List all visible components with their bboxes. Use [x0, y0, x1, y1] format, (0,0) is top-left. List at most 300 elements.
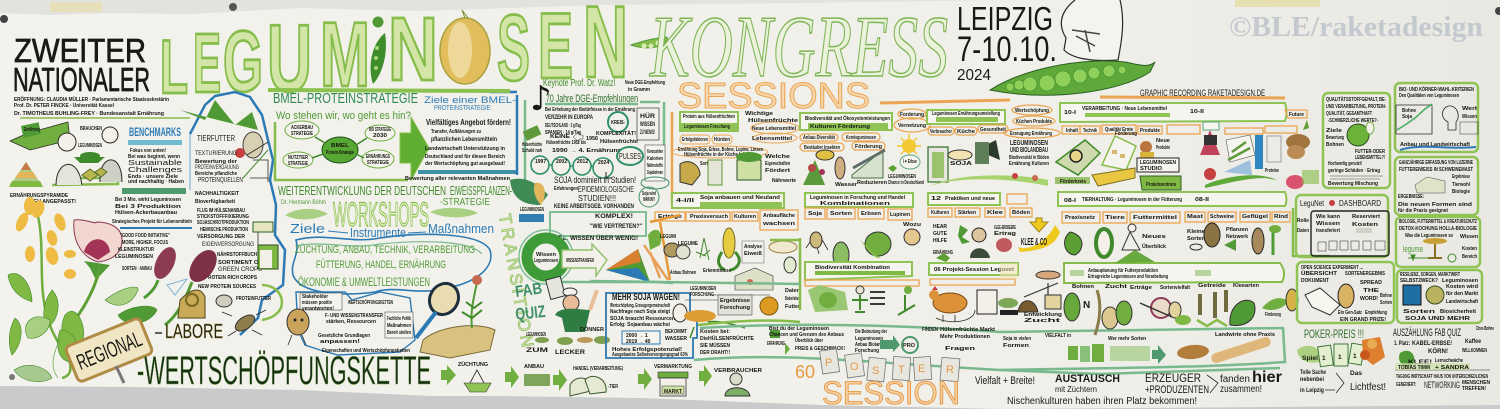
row 3 right: legume characters: Bohnen: [1072, 284, 1094, 290]
heading: Weiterentwicklung Eiweißpflanzenstrategie: -STRATEGIE: [440, 197, 490, 208]
session 2: pollinators and climate: Kornleguminosen: [846, 135, 876, 141]
session 1: Ernährung illustrations: Erfolgsfaktoren: [682, 137, 708, 143]
session 3: Landwirtschaft, Ernährungs-Kommunikation: LEGUMINOSEN: [1010, 140, 1048, 147]
panel: Auszählung FAB Quiz: [1393, 326, 1494, 392]
row 2 right: Klee &amp; Co: Netzwerk: [1226, 234, 1248, 240]
row 2 left illustrations: corn and characters: Anbau Bohnen: [670, 270, 696, 276]
panel: row 2 left field illustration: Bodenleben: [785, 296, 800, 302]
row 2 orange idea boxes: Praxisnetz: [1065, 215, 1096, 221]
session 2: pollinators and climate: Anbau Diversität: [803, 135, 835, 141]
session 1: Ernährung illustrations: Neue Lebensmittel: [752, 126, 797, 132]
row 2 session headers: Kombinationen: [820, 201, 890, 207]
panel: complex studies note: KEINE ARBEITSGEB. VORHANDEN: [554, 203, 634, 210]
title: Leguminosen: L: [160, 25, 188, 110]
icon: clover blossoms: KLEINSTRUKTUR: [118, 247, 154, 253]
session 10: books, butter, studio: Förderung: [1115, 131, 1137, 137]
icon: halved legume as letter O: [440, 10, 490, 84]
text: poster session takeaways: AUSTAUSCH: [1055, 373, 1120, 385]
session 1: Ernährung illustrations: Wichtige: [745, 111, 773, 117]
heading: Sessions: [672, 75, 1285, 205]
text: poster session takeaways: ERZEUGER: [1145, 371, 1201, 385]
panel: resource cloud with Tierfutter list: NEW PROTEIN SOURCES: [198, 284, 257, 290]
panel: poster session results: Anbau Bioland: [855, 342, 883, 348]
text: Soja dominiert in Studien: STUDIEN!!!: [578, 194, 616, 203]
value chain: Verbraucher: [714, 368, 762, 396]
panel: Bio- und Körner-Wahlkriterien: Soja: [1402, 114, 1412, 120]
chart: green donut: Wissen: [536, 252, 556, 258]
icon: sun and Love Boden: Chance in Deutschland: [888, 180, 924, 186]
panel: Ganzjährige Erfassung: FUTTEREIWEISS IN SCHWEINEMAST: [1399, 167, 1473, 173]
row 3 headers: Anbauplanung für Futterproduktion: [1088, 268, 1158, 274]
panel: Kosten und Diskussion: Die: [700, 336, 708, 342]
illustration: chef with quiz sign: LEGUMINOSEN: [526, 332, 546, 338]
row 2 right: Klee &amp; Co: Neues: [1142, 234, 1166, 240]
panel: Dashboard: Reserviert: [1352, 214, 1380, 220]
row 2 left illustrations: corn and characters: Eiweiß: [744, 251, 762, 257]
row 2 orange idea boxes: Soja: [808, 211, 822, 217]
row 2 session headers: 08-I: [1064, 198, 1077, 204]
text: poster session takeaways: Nischenkulturen haben ihren Platz bekommen!: [1007, 396, 1197, 407]
badge: Pulses: Nährstoffe: [647, 163, 663, 169]
panel: Kosten und Diskussion: DER DRAHT!!: [700, 350, 730, 356]
heading: Weiterentwicklung Eiweißpflanzenstrategie: WEITERENTWICKLUNG DER DEUTSCHEN: [278, 183, 446, 198]
row 2 middle: green characters: HEAR: [933, 224, 947, 230]
panel: Mehr Soja wagen: MEHR SOJA WAGEN!: [612, 292, 680, 303]
chart: triangle pyramid: [606, 245, 668, 282]
illustration: two presenters with a tray: LEGUMINOSEN: [78, 143, 102, 149]
session 3: Landwirtschaft, Ernährungs-Kommunikation: Küche: [957, 129, 975, 135]
diagram: pyramid timeline circles: 2012: [577, 159, 588, 165]
row 2 orange idea boxes: wachsen: [761, 221, 795, 227]
heading: 60 Poster Session: E: [918, 363, 925, 375]
diagram: pyramid timeline circles: 1997: [535, 159, 546, 165]
session 10: books, butter, studio: Technik: [1083, 128, 1097, 134]
row 3 right: legume characters: Sortenvielfalt: [1160, 285, 1190, 291]
heading: 60 Poster Session: S: [872, 365, 879, 377]
row 2 right: Klee &amp; Co: [994, 218, 1281, 263]
row 2 orange idea boxes: Tiere: [1105, 215, 1125, 221]
panel: poster session results: Forschung: [855, 348, 879, 354]
panel: Auszählung FAB Quiz: Kaffee: [1465, 338, 1481, 345]
illustration: chef with quiz sign: ZUM: [526, 347, 548, 354]
panel: workshop results: F- UND WISSENSTRANSFER: [325, 313, 383, 319]
heading: Weiterentwicklung Eiweißpflanzenstrategie: [278, 183, 512, 208]
session 10: books, butter, studio: Proteinzentrum: [1146, 182, 1176, 188]
diagram: pyramid timeline circles: 2024: [598, 160, 609, 166]
panel: Bio- und Körner-Wahlkriterien: [1395, 83, 1478, 152]
badge: Pulses: Kalorien: [647, 156, 663, 162]
session 2: pollinators and climate: Vernetzung: [898, 123, 926, 129]
panel: poster session results: PREIS & GESCHMACK!: [795, 346, 845, 352]
panel: resource cloud with Tierfutter list: SORTIMENT OF: [218, 260, 262, 266]
row 2 session headers: [672, 192, 1286, 208]
credits: speakers of the opening: Prof. Dr. PETER FINCKE · Universität Kassel: [14, 103, 115, 109]
panel: Dashboard: Wissen: [1316, 221, 1340, 227]
panel: keynote Prof. Dr. Watzl: 1956: [586, 136, 598, 142]
session 10: books, butter, studio: Qualität Ernte: [1105, 127, 1133, 133]
panel: poster session results: VIELFALT in: [1045, 333, 1071, 339]
panel: Resilienz und Sorten: Leguminosen: [1442, 278, 1478, 284]
row 2 middle: green characters: GUTE: [933, 231, 948, 237]
panel: workshop results: Gesetzliche Grundlagen: [318, 333, 370, 339]
row 3 right: legume characters: [1064, 283, 1298, 335]
text: Ernährungspyramide: ERNÄHRUNGSPYRAMIDE: [10, 192, 69, 199]
badge: Pulses: Kennzahlen: [647, 149, 663, 155]
row 3 left: plant illustrations: [808, 285, 915, 315]
panel: goals of the BMEL protein strategy: Landwirtschaft Unterstützung in: [425, 146, 505, 152]
session 10: books, butter, studio: Produkte: [1140, 128, 1160, 134]
panel: benchmarks: Bei was beginnt, wenn: [128, 154, 180, 160]
panel: keynote Prof. Dr. Watzl: KEINE: [550, 134, 571, 140]
panel: complex studies note: "WIE VERTRETEN?": [590, 223, 642, 230]
session 1: Ernährung illustrations: Sorte: [700, 161, 710, 167]
panel: poster session results: FINDEN: [922, 327, 938, 333]
session 2: pollinators and climate: Förderung: [855, 144, 882, 150]
session 2: pollinators and climate: Kulturen Förderung: [810, 124, 870, 130]
panel: resource cloud with Tierfutter list: PROTEINQUELLEN: [198, 177, 243, 184]
panel: workshop results: Stakeholder: [302, 294, 328, 300]
icon: yellow flowers and green plant: [8, 197, 157, 382]
panel: poster session results: Bist du der Leguminosen: [769, 326, 829, 332]
panel: Resilienz und Sorten: [1397, 270, 1482, 323]
panel: keynote Prof. Dr. Watzl: Schuld nah: [522, 148, 542, 154]
panel: keynote Prof. Dr. Watzl: ZU WENIG!: [640, 129, 655, 136]
icon: clover blossoms: LEGUMINOSEN: [115, 254, 153, 260]
panel: resource cloud with Tierfutter list: HEIMISCHE PRODUKTION: [200, 227, 248, 233]
panel: resource cloud with Tierfutter list: NACHHALTIGKEIT: [195, 191, 239, 197]
panel: Mehr Soja wagen: Ausgebautes Selbstversorgungsgrad 63%: [612, 352, 688, 358]
icon: pea pod as letter I: [371, 16, 386, 84]
panel: Open Science Experiment: SORTENERGEBNIS: [1345, 271, 1386, 277]
panel: Mehr Soja wagen: WASSER: [665, 336, 687, 342]
panel: benchmarks: Fokus von unten!: [130, 148, 166, 154]
panel: Poker Preis: Lichtfest!: [1350, 382, 1386, 393]
value chain: Züchtung: ZÜCHTUNG: [458, 361, 488, 368]
row 2 orange idea boxes: Praxisversuch: [690, 214, 728, 220]
panel: Mehr Soja wagen: Wertschöpfung, Erzeugergemeinschaft: [610, 303, 670, 309]
row 2 left illustrations: corn and characters: LEGUMI: [660, 234, 676, 240]
icon: Regional sign: [65, 317, 153, 383]
watermark: ©BLE/raketadesign: [1229, 11, 1483, 43]
panel: Bio- und Körner-Wahlkriterien: Wissen: [1462, 114, 1477, 120]
row 2 orange idea boxes: [655, 208, 1290, 230]
row 2 orange idea boxes: Sorten: [830, 211, 852, 217]
icon: hand holding a pea pod: [990, 0, 1155, 95]
panel: Open Science Experiment: Ein Gen-Satz: [1338, 310, 1362, 316]
session 10: books, butter, studio: Neue: [1156, 138, 1170, 144]
text: poster session takeaways: fanden: [1220, 374, 1250, 385]
session 3: Landwirtschaft, Ernährungs-Kommunikation: Küchen Produkte: [1016, 119, 1052, 125]
diagram: pyramid timeline circles: [531, 156, 613, 178]
panel: keynote Prof. Dr. Watzl: Bei Erhebung der Bedürfnisse in der Ernährung: [545, 107, 635, 113]
text: poster session takeaways: +PRODUZENTEN: [1145, 384, 1209, 396]
panel: Bio- und Körner-Wahlkriterien: Anbau und Landwirtschaft: [1400, 142, 1470, 148]
panel: poster session results: Hülsenfrüchte Markt: [940, 327, 995, 333]
text: Soja dominiert in Studien: LEGUMINOSEN: [520, 207, 544, 213]
row 2 orange idea boxes: Rind: [1274, 214, 1288, 220]
session 2: pollinators and climate: Bestäuber Insekten: [804, 145, 840, 151]
row 3 headers: 06 Projekt-Session Leguvet: [934, 267, 1014, 273]
badge: Pulses: WARUM?: [643, 197, 655, 203]
panel: Dashboard: Wie kann: [1316, 214, 1340, 220]
row 2 right: Klee &amp; Co: Kleine: [1187, 229, 1205, 235]
session 10: books, butter, studio: Inhalt: [1066, 128, 1078, 134]
panel: row 2 left field illustration: Futter: [785, 304, 800, 310]
badge: Pulses: [617, 145, 669, 207]
panel: Open Science Experiment: EIN GRAND PRIZE!: [1340, 317, 1386, 323]
panel: goals of the BMEL protein strategy: Bewertung aller relevanten Maßnahmen: [405, 176, 510, 182]
text: EIWEISSPFLANZEN-: [450, 183, 512, 198]
panel: Poker Preis: Das: [1350, 370, 1362, 377]
panel: Open Science Experiment: ÜBERSICHT: [1301, 270, 1337, 277]
text: poster session takeaways: zusammen!: [1220, 384, 1262, 395]
row 3 right: legume characters: Förderung: [1265, 312, 1281, 318]
panel: poster session results: Soja in vielen: [1003, 336, 1031, 342]
panel: Ganzjährige Erfassung: Die neuen Formen sind: [1398, 202, 1472, 208]
text: Wertschöpfungskette: -WERTSCHÖPFUNGSKETTE: [137, 349, 431, 393]
illustration: scales: [1018, 271, 1062, 324]
row 2 left illustrations: corn and characters: Analyse: [744, 244, 762, 250]
text: poster session takeaways: Vielfalt + Breite!: [975, 375, 1035, 387]
icon: signboards: [253, 222, 278, 269]
value chain: Handel: -TIER: [608, 384, 618, 390]
icon: big green arrow: [400, 117, 429, 180]
badge: Pulses: PULSES: [619, 152, 641, 161]
value chain: Vermarktung market stall: [654, 364, 712, 396]
illustration: two presenters with a tray: Ernährung: [24, 127, 40, 133]
session 10: books, butter, studio: 10-II: [1190, 109, 1205, 115]
row 2 session headers: 12: [931, 196, 941, 202]
panel: Auszählung FAB Quiz: KÖRN!: [1428, 346, 1448, 355]
cloud: workshop topics: ZÜCHTUNG, ANBAU, TECHNIK, VERARBEITUNG: [295, 244, 475, 256]
value chain: Handel: HANDEL (VERARBEITUNG): [573, 366, 623, 372]
session 1: Ernährung illustrations: Protein aus Hülsenfrüchten: [683, 114, 735, 120]
labels: Ziele Instrumente Maßnahmen: Instrumente: [350, 225, 406, 240]
diagram: strategy map: Protein-Strategie: [326, 150, 354, 156]
panel: goals of the BMEL protein strategy: Ziele einer BMEL-: [424, 95, 516, 106]
panel: poster session results: Landwirte ohne Praxis: [1215, 332, 1275, 338]
title: place and date: [957, 0, 1057, 84]
row 2 right: Klee &amp; Co: Pflanzen: [1226, 227, 1248, 233]
panel: Auszählung FAB Quiz: WILLKOMMEN: [1462, 348, 1487, 354]
panel: Poker Preis: in Leipzig: [1300, 387, 1324, 394]
panel: Ganzjährige Erfassung: Ergebnisse: [1452, 174, 1470, 180]
session 3: Landwirtschaft, Ernährungs-Kommunikation: Ernährung Kulturen: [1009, 161, 1049, 167]
labels: Ziele Instrumente Maßnahmen: Ziele: [290, 221, 325, 236]
panel: Open Science Experiment: Sorten: [1380, 300, 1392, 306]
cloud: workshop topics: [292, 234, 491, 294]
icon: arrow to triangle: WISSENSTRANSFER: [566, 258, 594, 264]
panel: poster session results: Wer mehr Sorten: [1108, 336, 1146, 342]
session 3: Landwirtschaft, Ernährungs-Kommunikation: UND BIOLANDBAU: [1010, 147, 1048, 154]
panel: Resilienz und Sorten: für den Markt: [1446, 291, 1478, 297]
value chain: Anbau: ANBAU: [524, 364, 544, 370]
icon: Regional sign: REGIONAL: [73, 326, 145, 375]
icon: clover blossoms: SORTEN · ANBAU: [122, 266, 152, 272]
panel: Bio- und Körner-Wahlkriterien: Wert: [1462, 106, 1477, 112]
panel: Kosten und Diskussion: HÜLSENFRÜCHTE: [708, 335, 755, 342]
title: place and date: LEIPZIG: [957, 0, 1053, 37]
credits: speakers of the opening: Dr. TIMOTHEUS BUHLING-FREY · Bundesanstalt Ernährung: [14, 111, 164, 117]
icon: pod separator: [631, 37, 667, 48]
row 3 right: legume characters: Zucht: [1105, 284, 1128, 290]
session 1: Ernährung illustrations: Hülsenfrüchte in der Küche bringen: [684, 152, 754, 158]
panel: poster session results: [700, 325, 1285, 374]
panel: Mehr Soja wagen: Hohes Erfolgspotenzial!: [612, 347, 682, 353]
panel: Dashboard: [1293, 195, 1389, 257]
panel: Open Science Experiment: THE: [1363, 288, 1380, 294]
text: poster session takeaways: mit Züchtern: [1055, 385, 1097, 394]
panel: Poker Preis: nebenbei: [1300, 376, 1324, 383]
panel: workshop results: anpassen!: [320, 339, 361, 345]
session 3: Landwirtschaft, Ernährungs-Kommunikation: Verbraucher: [930, 129, 952, 135]
row 2 orange idea boxes: Schweine: [1210, 214, 1234, 220]
panel: workshop results: verantworten!: [302, 306, 334, 312]
session 10 right: people and data: Future: [1289, 112, 1304, 118]
row 2 orange idea boxes: Kulturen: [734, 214, 756, 220]
session 2: pollinators and climate: Biodiversität und Ökosystemleistungen: [805, 115, 890, 122]
panel: keynote Prof. Dr. Watzl: Hülsenfrüchte: [600, 139, 638, 145]
chart: green donut: Leguminosen: [534, 258, 558, 264]
panel: workshop results: Maßnahmen: [387, 323, 411, 329]
panel: Bestäuber und Leguminosen: Kosten: [1462, 246, 1477, 252]
panel: resource cloud with Tierfutter list: TEXTURIERUNG: [195, 150, 237, 157]
panel: BMEL Proteinstrategie: Wo stehen wir, wo geht es hin?: [276, 110, 411, 122]
labels: Ziele Instrumente Maßnahmen: Maßnahmen: [428, 221, 494, 236]
panel: goals of the BMEL protein strategy: Transfer, Aufklärungen zu: [431, 129, 481, 135]
panel: Open Science Experiment: [1297, 262, 1394, 323]
panel: keynote Prof. Dr. Watzl: [522, 78, 665, 180]
panel: goals of the BMEL protein strategy: Deutschland und für diesen Bereich: [425, 154, 505, 160]
value chain: Vermarktung market stall: MARKT: [664, 389, 682, 395]
row 2 right: Klee &amp; Co: Sorten: [1187, 236, 1205, 242]
panel: resource cloud with Tierfutter list: EIGENVERSORGUNG: [202, 241, 254, 248]
icon: sun and Love Boden: [888, 134, 924, 186]
panel: row 2 left field illustration: [684, 286, 800, 338]
title: place and date: 7-10.10.: [957, 30, 1057, 69]
panel: complex studies note: KOMPLEX!: [595, 213, 633, 220]
panel: Qualitätsstoffgehalt: FUTTER-ODER: [1355, 149, 1385, 155]
title: Kongress: KONGRESS: [649, 0, 948, 96]
row 2 orange idea boxes: Erträge: [658, 214, 682, 220]
panel: Qualitätsstoffgehalt: -SCHMERZLICHE WERTE?-: [1328, 118, 1378, 124]
icon: pink pea flower: [74, 220, 122, 280]
panel: benchmarks: Ends · unsere Ziele: [128, 174, 178, 180]
panel: poster session results: Mehr Produktionen: [940, 334, 990, 340]
panel: poster session results: Fragen: [945, 346, 975, 352]
panel: row 2 left field illustration: LEGUMINOSEN: [690, 286, 716, 292]
session 2: pollinators and climate: [800, 109, 930, 188]
session 10: books, butter, studio: 10-I: [1064, 110, 1077, 116]
text: Soja dominiert in Studien: SOJA dominiert in Studien!: [554, 175, 636, 186]
row 2 left illustrations: corn and characters: [590, 215, 800, 310]
panel: Mehr Soja wagen: 2000 → 1: [626, 333, 648, 339]
session 1: Ernährung illustrations: [672, 111, 799, 185]
panel: workshop results: müssen positiv: [302, 300, 332, 306]
session 1: Ernährung illustrations: Ernährung Soja, Erbse, Bohne, Lupine, Linsen: [678, 147, 763, 153]
row 2 middle: green characters: HILFE: [933, 238, 948, 244]
heading: FAB Quiz: [514, 280, 673, 324]
session 10: books, butter, studio: VERARBEITUNG · Neue Lebensmittel: [1082, 106, 1168, 112]
cloud: workshop topics: FÜTTERUNG, HANDEL, ERNÄHRUNG: [316, 259, 446, 271]
row 2 session headers: 08-II: [1195, 197, 1210, 203]
credits: speakers of the opening: [14, 96, 190, 118]
panel: Qualitätsstoffgehalt: Hochwertig genutzt!: [1328, 161, 1362, 167]
panel: Poker Preis: 1: [1353, 353, 1357, 360]
text and icon: Labore with microscope: LABORE: [165, 321, 223, 343]
panel: Qualitätsstoffgehalt: QUALITÄTSSTOFFGEHALT, BE-: [1326, 96, 1386, 103]
icon: beetle and seed: [216, 285, 282, 336]
panel: workshop results: stärken, Ressourcen: [326, 319, 376, 325]
session 1: Ernährung illustrations: Leguminosen Forschung: [684, 124, 730, 130]
icon: clover blossoms: MORE, HIGHER, FOCUS: [122, 240, 169, 246]
panel: Ganzjährige Erfassung: Biologie: [1452, 189, 1470, 195]
heading: Weiterentwicklung Eiweißpflanzenstrategie: Dr. Hermann Böhm: [281, 199, 326, 206]
text: Ernährungspyramide: NEU ANGEPASST!: [30, 199, 76, 205]
illustration: orange hen: [929, 286, 1018, 322]
icon: sun and Love Boden: I ♥ Erbse: [903, 159, 917, 165]
panel: benchmarks: [112, 125, 192, 228]
heading: 60 Poster Session: 60: [795, 362, 815, 382]
panel: workshop results: Fachliche Politik: [387, 316, 411, 322]
panel: keynote Prof. Dr. Watzl: ♪: [530, 79, 552, 119]
title: Leguminosen: N: [388, 0, 438, 100]
heading: 60 Poster Session: [795, 349, 960, 409]
session 10: books, butter, studio: Förderkreis: [1060, 179, 1086, 185]
diagram: strategy map: STRATEGIE: [367, 160, 390, 166]
session 3: Landwirtschaft, Ernährungs-Kommunikation: Biodiversität in Böden: [1009, 155, 1049, 161]
panel: resource cloud with Tierfutter list: Bioverfügbarkeit: [195, 199, 235, 205]
panel: Resilienz und Sorten: SOJA UND MEHR: [1405, 316, 1471, 322]
panel: Kosten und Diskussion: SIE MÜSSEN: [700, 342, 730, 349]
session 3: Landwirtschaft, Ernährungs-Kommunikation: Leguminosen Ernährungsumstellung: [932, 111, 1000, 117]
heading: Workshops: [285, 196, 478, 234]
panel: Mehr Soja wagen: BEKOMMT: [665, 329, 687, 335]
illustration: two presenters with a tray: [10, 122, 122, 185]
panel: benchmarks: Challenges: [128, 167, 183, 174]
panel: Auszählung FAB Quiz: GENERIERT:: [1396, 382, 1416, 388]
row 2 middle: green characters: Wozu: [903, 222, 921, 228]
panel: Dashboard: Rolle: [1297, 218, 1309, 224]
icon: magnifier over soil block with plant: [416, 275, 495, 358]
panel: BMEL Proteinstrategie: [273, 90, 429, 180]
panel: benchmarks: Hülsen-Ackerbauanbau: [115, 210, 177, 216]
row 2 orange idea boxes: Kulturen: [931, 210, 949, 216]
title: place and date: 2024: [957, 67, 991, 84]
panel: keynote Prof. Dr. Watzl: Hülsenfrüchte 1952 bis: [546, 140, 586, 146]
panel: keynote Prof. Dr. Watzl: DEUTSCHLAND · 3 g/Tag: [545, 123, 581, 129]
panel: Auszählung FAB Quiz: TREFFEN!: [1462, 386, 1486, 392]
panel: Poker Preis: Tolle Sache: [1300, 369, 1326, 376]
row 2 middle: green characters: [806, 222, 990, 268]
panel: Mehr Soja wagen: Nachfrage nach Soja steigt: [610, 309, 670, 315]
panel: resource cloud with Tierfutter list: VERSORGUNG DER: [197, 234, 245, 240]
heading: FAB Quiz: FAB: [514, 280, 543, 301]
text: Ernährungspyramide: [10, 192, 76, 205]
text: Soja dominiert in Studien: EPIDEMIOLOGISCHE: [578, 185, 634, 194]
diagram: strategy map: STRATEGIE: [291, 131, 314, 137]
panel: row 2 left field illustration: Ergebnisse: [720, 298, 750, 304]
value chain: Vermarktung market stall: VERMARKTUNG: [654, 364, 692, 370]
panel: Dashboard: Daten: [1297, 228, 1309, 234]
panel: goals of the BMEL protein strategy: Vielfältiges Angebot fördern!: [426, 118, 511, 127]
heading: 60 Poster Session: P: [825, 357, 832, 369]
row 2 right: Klee &amp; Co: Ertrag: [994, 231, 1016, 237]
panel: Auszählung FAB Quiz: NETWORKING: [1424, 380, 1460, 390]
diagram: strategy map: [283, 121, 395, 168]
panel: Resilienz und Sorten: Landwirtschaft: [1446, 299, 1478, 305]
panel: Dashboard: DASHBOARD: [1339, 199, 1381, 208]
